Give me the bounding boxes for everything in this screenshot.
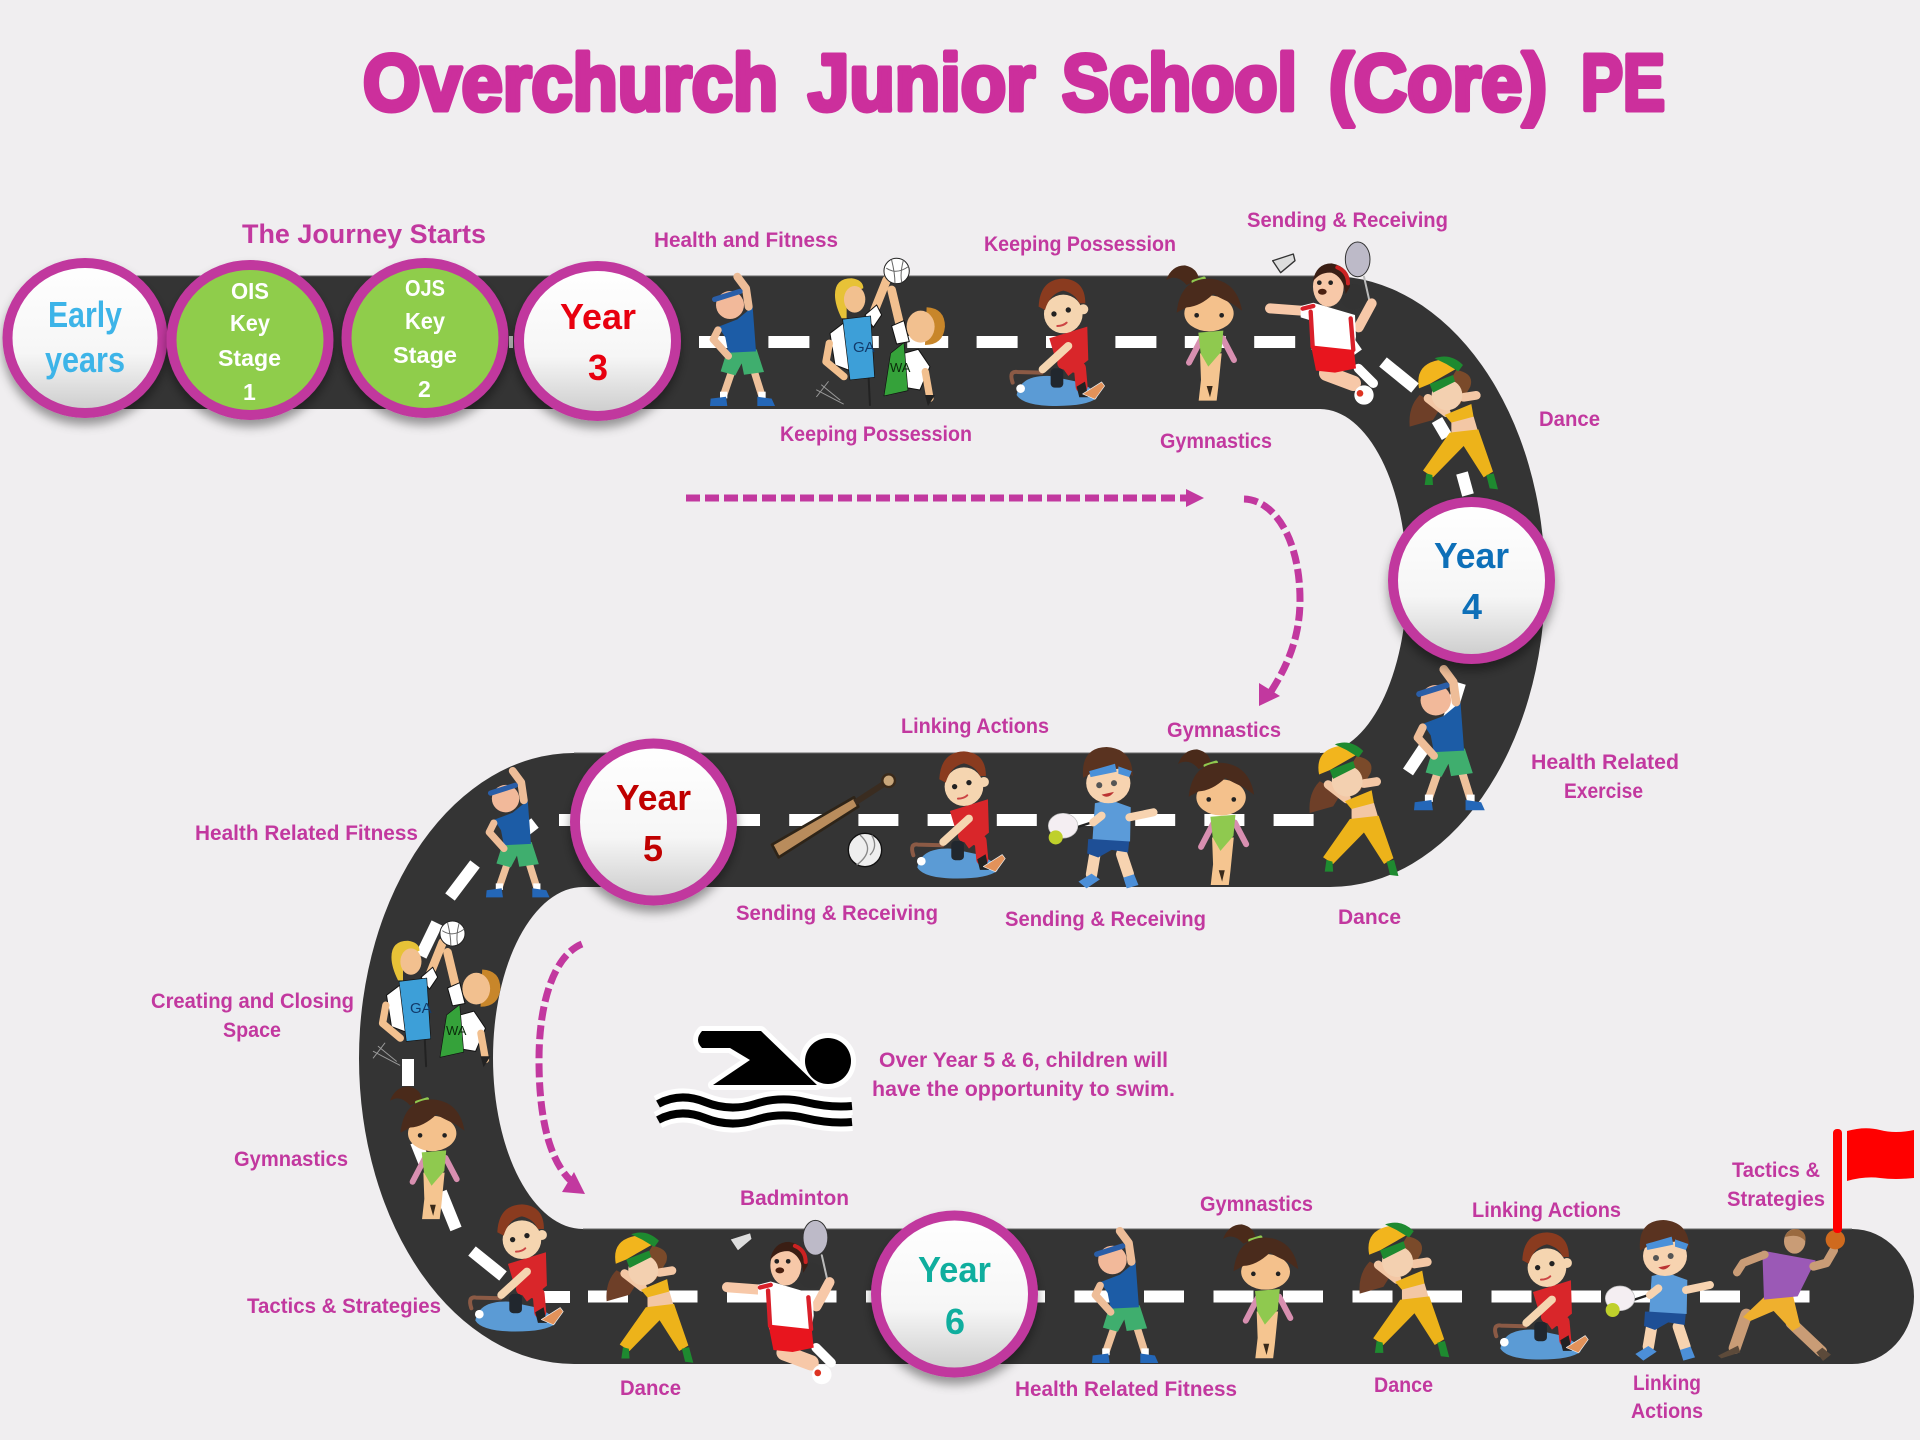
figure: netball players: WA	[446, 1023, 467, 1038]
icon: bat and ball	[772, 774, 895, 867]
label: Sending & Receiving	[736, 902, 938, 925]
label: linking actions: Actions	[1631, 1400, 1703, 1423]
figure: dancer	[606, 1233, 693, 1363]
label: Sending & Receiving	[1247, 209, 1448, 232]
label: creating and closing space: Space	[223, 1019, 281, 1042]
stop: OJS key stage 2: Stage	[393, 342, 457, 368]
label: creating and closing space	[151, 990, 354, 1042]
figure: gymnast	[1166, 265, 1242, 401]
label: health related exercise: Health Related	[1531, 751, 1679, 774]
label: Health Related Fitness	[1015, 1378, 1237, 1401]
swimming note: have the opportunity to swim.	[872, 1078, 1175, 1101]
figure: hockey player	[470, 1204, 563, 1332]
stop: year 6: Year	[918, 1249, 991, 1290]
swimming note	[872, 1049, 1175, 1101]
stop: year 6	[876, 1216, 1033, 1372]
road	[60, 276, 1914, 1364]
stop: OIS key stage 1: 1	[243, 379, 256, 405]
figure: gymnast	[1223, 1224, 1298, 1358]
label: Gymnastics	[1160, 430, 1272, 453]
figure: tennis player	[1048, 747, 1154, 888]
stop: year 3: Year	[560, 296, 636, 337]
stop: year 6: 6	[945, 1301, 965, 1342]
label: Tactics & Strategies	[247, 1295, 441, 1318]
label: Sending & Receiving	[1005, 908, 1206, 931]
label: tactics and strategies: Strategies	[1727, 1188, 1825, 1211]
label: Dance	[1374, 1374, 1433, 1397]
icon: swimmer	[658, 1031, 852, 1124]
figure: gymnast	[1178, 749, 1254, 885]
label: linking actions	[1631, 1372, 1703, 1423]
label: Keeping Possession	[984, 233, 1176, 256]
figure: tennis player	[1605, 1220, 1710, 1361]
figure: netball players: WA	[890, 360, 911, 375]
stop: OIS key stage 1: OIS	[231, 278, 269, 304]
figure: netball players: GA	[853, 339, 875, 356]
figure: netball players	[817, 258, 945, 406]
stop: OJS key stage 2: Key	[405, 308, 445, 334]
label: Health Related Fitness	[195, 822, 418, 845]
label: Dance	[1539, 408, 1600, 431]
stop: OJS key stage 2	[346, 263, 504, 413]
icon: finish flag	[1833, 1128, 1914, 1233]
label: the journey starts: The Journey Starts	[242, 219, 486, 249]
figure: dancer	[1309, 743, 1398, 876]
figure: hockey player	[1495, 1232, 1588, 1360]
label: Gymnastics	[234, 1148, 348, 1171]
title: (Core)	[1329, 38, 1547, 127]
figure: netball players: GA	[410, 1000, 432, 1017]
stop: early years: Early	[48, 294, 122, 335]
figure: badminton player	[1270, 242, 1374, 405]
stop: early years: years	[45, 339, 125, 380]
arrow: straight dashed	[686, 489, 1204, 507]
figure: stretching child	[1414, 669, 1485, 810]
arrow: curved dashed right	[1244, 499, 1300, 706]
figure: hockey player	[912, 751, 1005, 879]
stop: year 5: 5	[643, 828, 663, 869]
stop: year 4	[1393, 502, 1550, 659]
figure: handball player	[1718, 1229, 1845, 1361]
figure: stretching child	[1092, 1231, 1158, 1363]
label: Linking Actions	[1472, 1199, 1621, 1222]
stop: early years	[8, 263, 162, 413]
label: tactics and strategies	[1727, 1159, 1825, 1211]
figure: gymnast	[390, 1086, 465, 1219]
label: linking actions: Linking	[1633, 1372, 1701, 1395]
title	[363, 38, 1665, 127]
stop: year 4: Year	[1434, 535, 1509, 576]
stop: year 5	[575, 744, 732, 900]
label: Dance	[1338, 906, 1401, 929]
swimming note: Over Year 5 & 6, children will	[879, 1049, 1168, 1072]
title: Junior	[808, 38, 1035, 127]
figure: stretching child	[710, 277, 775, 406]
stop: OIS key stage 1	[172, 265, 328, 415]
stop: year 4: 4	[1462, 586, 1482, 627]
label: Linking Actions	[901, 715, 1049, 738]
stop: OIS key stage 1: Stage	[218, 345, 281, 371]
label: health related exercise: Exercise	[1564, 780, 1643, 803]
label: Dance	[620, 1377, 681, 1400]
label: Badminton	[740, 1187, 849, 1210]
label: Gymnastics	[1167, 719, 1281, 742]
label: tactics and strategies: Tactics &	[1732, 1159, 1820, 1182]
figure: badminton player	[727, 1220, 832, 1384]
figure: dancer	[1359, 1223, 1449, 1357]
figure: dancer	[1409, 357, 1498, 489]
stop: year 3	[519, 266, 676, 416]
stop: year 5: Year	[616, 777, 691, 818]
road centre line dashes	[408, 336, 1810, 1297]
label: Health and Fitness	[654, 229, 838, 252]
figure: stretching child	[486, 771, 550, 897]
label: health related exercise	[1531, 751, 1679, 803]
stop: OJS key stage 2: OJS	[405, 275, 445, 301]
figure: netball players	[373, 921, 500, 1067]
stop: year 3: 3	[588, 347, 608, 388]
title: Overchurch	[363, 38, 778, 127]
label: creating and closing space: Creating and Closing	[151, 990, 354, 1013]
title: School	[1062, 38, 1297, 127]
label: Keeping Possession	[780, 423, 972, 446]
figure: hockey player	[1011, 279, 1105, 406]
arrow: curved dashed left	[539, 944, 585, 1194]
label: Gymnastics	[1200, 1193, 1313, 1216]
title: PE	[1581, 38, 1665, 127]
stop: OJS key stage 2: 2	[418, 376, 431, 402]
stop: OIS key stage 1: Key	[230, 310, 270, 336]
